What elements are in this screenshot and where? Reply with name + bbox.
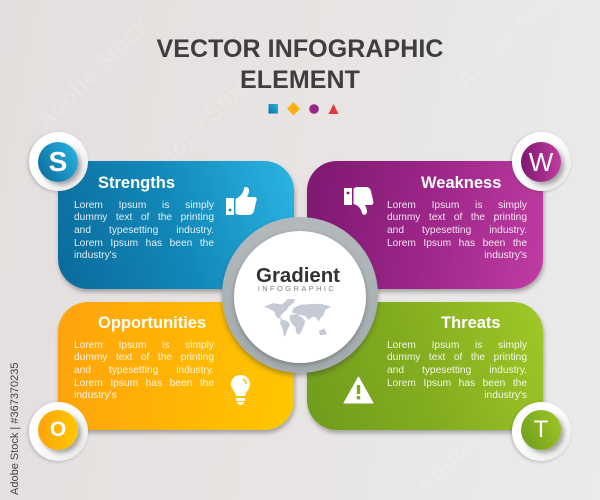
panel: opportunities	[58, 302, 294, 430]
panel: weakness	[307, 161, 543, 289]
text block: strengths	[74, 200, 214, 261]
text block: strengths: Lorem Ipsum is simply	[74, 200, 214, 210]
text: Adobe Stock	[412, 377, 534, 500]
badge: O	[29, 402, 88, 461]
text block: weakness: industry's	[484, 250, 527, 261]
text block: weakness: Lorem Ipsum has been the	[387, 238, 527, 249]
text block: threats: industry's	[484, 390, 527, 401]
badge: S	[29, 132, 88, 191]
text block: strengths: and typesetting industry.	[74, 225, 214, 236]
icon: thumbs up	[226, 187, 257, 215]
title: ELEMENT	[240, 66, 360, 94]
text block: strengths: Lorem Ipsum has been the	[74, 238, 214, 249]
badge: S: S	[49, 146, 67, 177]
icon: light bulb	[231, 375, 250, 405]
text block: strengths: dummy text of the printing	[74, 212, 214, 223]
heading: strengths: Strengths	[98, 174, 175, 192]
heading: weakness: Weakness	[421, 174, 501, 192]
stock credit: Adobe Stock | #367370235	[9, 362, 21, 495]
decorative shape row	[268, 102, 338, 116]
badge: W	[512, 132, 571, 191]
icon: warning triangle	[344, 376, 374, 404]
heading: threats: Threats	[441, 314, 501, 332]
text block: threats: Lorem Ipsum has been the	[387, 378, 527, 389]
badge: W: W	[529, 147, 553, 177]
text block: threats: Lorem Ipsum is simply	[387, 340, 527, 350]
panel: threats	[307, 302, 543, 430]
heading: gradient: Gradient	[256, 264, 340, 287]
text block: strengths: industry's	[74, 250, 117, 261]
icon: world map	[264, 299, 331, 336]
badge: T: T	[534, 416, 548, 443]
title: VECTOR INFOGRAPHIC	[156, 35, 444, 63]
subheading: infographic: INFOGRAPHIC	[258, 284, 336, 293]
text block: opportunities: industry's	[74, 390, 117, 401]
text block: weakness	[387, 200, 527, 261]
center circle	[222, 217, 378, 373]
text: Adobe Stock	[32, 12, 154, 135]
heading: opportunities: Opportunities	[98, 314, 206, 332]
icon: thumbs down	[344, 187, 374, 215]
panel: strengths	[58, 161, 294, 289]
badge: T	[512, 402, 571, 461]
text block: weakness: and typesetting industry.	[387, 225, 527, 236]
text block: threats: dummy text of the printing	[387, 352, 527, 363]
title	[156, 35, 444, 94]
text: Adobe Stock	[142, 62, 264, 185]
text block: threats	[387, 340, 527, 401]
text block: opportunities	[74, 340, 214, 401]
white disc	[234, 231, 366, 363]
text block: weakness: dummy text of the printing	[387, 212, 527, 223]
text block: opportunities: dummy text of the printing	[74, 352, 214, 363]
text block: weakness: Lorem Ipsum is simply	[387, 200, 527, 210]
text block: opportunities: and typesetting industry.	[74, 365, 214, 376]
badge: O: O	[50, 418, 66, 441]
text block: opportunities: Lorem Ipsum is simply	[74, 340, 214, 350]
text block: opportunities: Lorem Ipsum has been the	[74, 378, 214, 389]
text block: threats: and typesetting industry.	[387, 365, 527, 376]
